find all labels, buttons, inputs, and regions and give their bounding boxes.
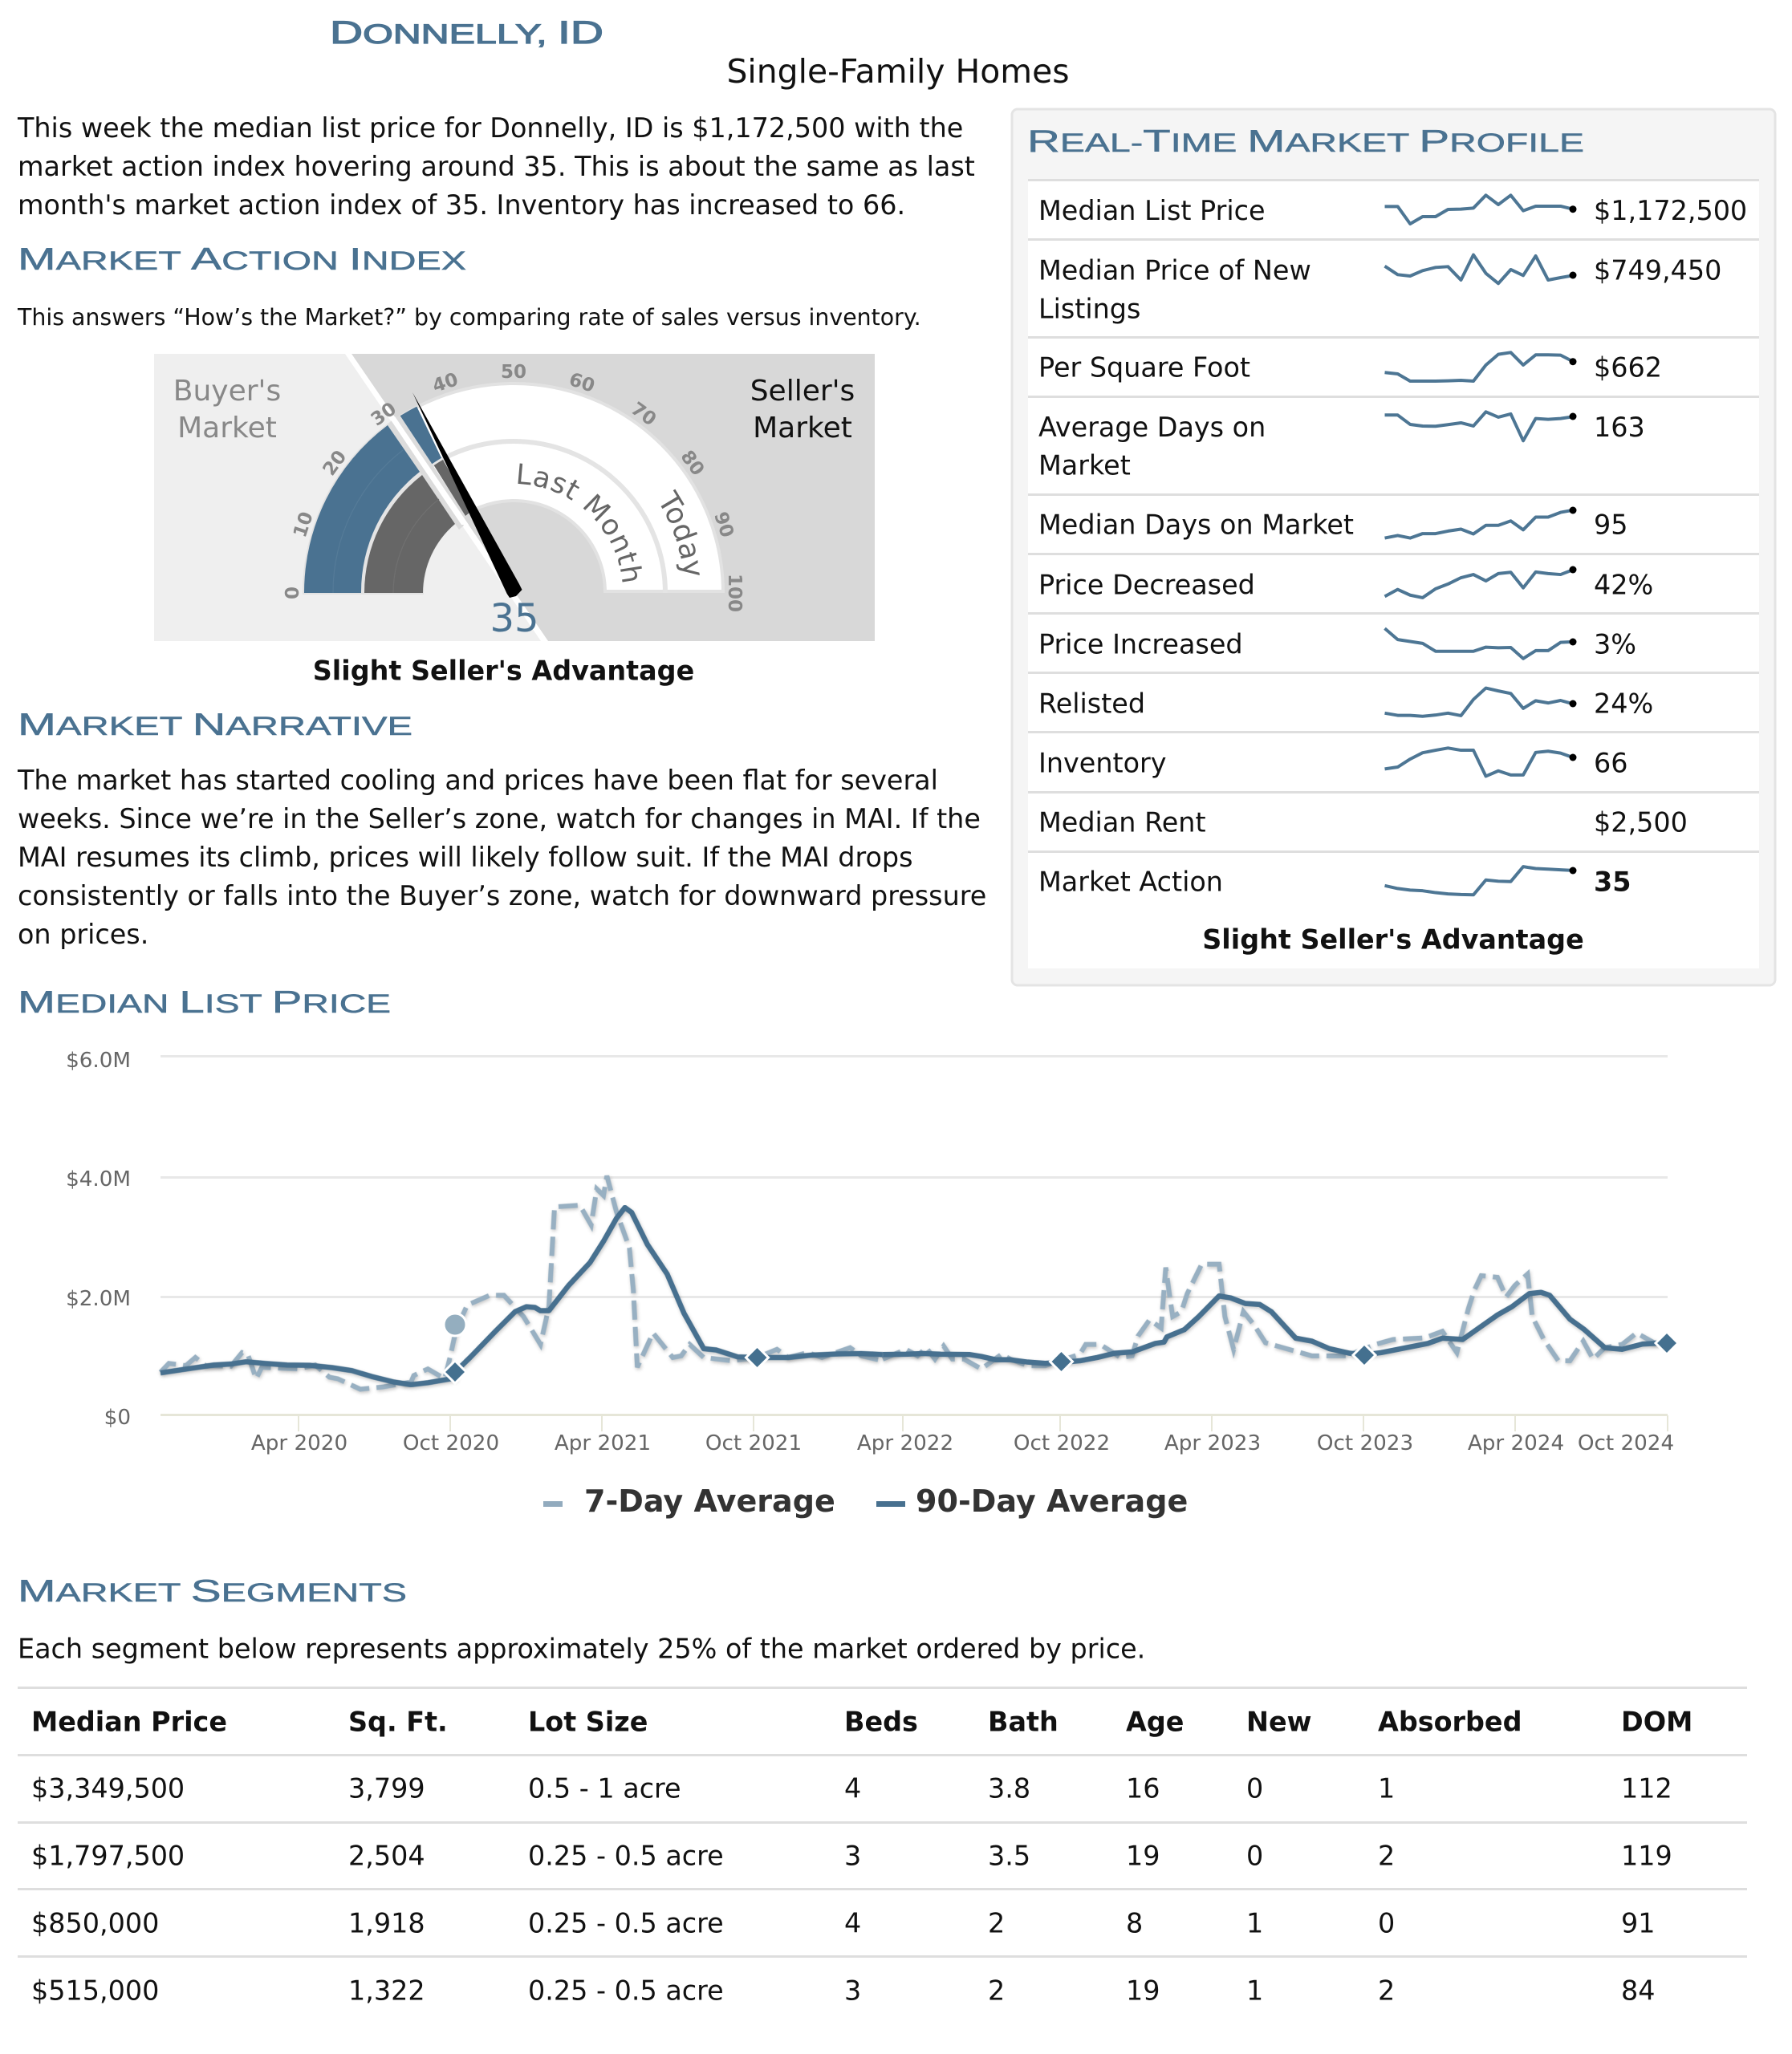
table header bbox=[31, 1706, 1692, 1738]
gauge label: seller's market bbox=[750, 375, 855, 444]
row values: 42% bbox=[1594, 570, 1653, 600]
gauge tick labels: 30 bbox=[368, 399, 400, 430]
table row 3: 0.25 - 0.5 acre bbox=[528, 1908, 724, 1938]
gauge background: buyer's side bbox=[154, 354, 875, 641]
row labels: Inventory bbox=[1038, 748, 1167, 778]
table row 2: 0 bbox=[1246, 1841, 1263, 1871]
y axis labels: $4.0M bbox=[66, 1167, 131, 1191]
gauge tick labels: 10 bbox=[290, 509, 318, 540]
row labels: Listings bbox=[1038, 294, 1140, 324]
table row 1: 4 bbox=[844, 1773, 861, 1804]
row values: $1,172,500 bbox=[1594, 195, 1747, 226]
y axis labels bbox=[66, 1049, 131, 1430]
row values: 66 bbox=[1594, 748, 1627, 778]
heading: median list price: M EDIAN L IST P RICE bbox=[18, 985, 391, 1020]
table: market segments bbox=[18, 1687, 1747, 2006]
table row 3: 0 bbox=[1378, 1908, 1395, 1938]
gauge background: seller's side bbox=[351, 354, 875, 641]
market narrative text: consistently or falls into the Buyer’s zone, watch for downward pressure bbox=[18, 880, 986, 911]
gauge label: buyer's market: Buyer's bbox=[173, 375, 281, 408]
y axis labels: $0 bbox=[104, 1406, 131, 1430]
gauge tick labels: 60 bbox=[567, 369, 597, 397]
table row 2: 3 bbox=[844, 1841, 861, 1871]
table header: Absorbed bbox=[1378, 1706, 1522, 1738]
legend: 90-Day Average bbox=[916, 1484, 1188, 1519]
intro paragraph: month's market action index of 35. Inventory has increased to 66. bbox=[18, 189, 905, 221]
gauge tick labels: 20 bbox=[319, 447, 351, 480]
table row 4 bbox=[31, 1975, 1655, 2006]
markers: diamonds on 90-day series bbox=[444, 1332, 1678, 1383]
gauge label: buyer's market bbox=[173, 375, 281, 444]
row labels: Median Price of New bbox=[1038, 255, 1311, 286]
panel: real-time market profile bbox=[1012, 109, 1775, 985]
table header: Age bbox=[1126, 1706, 1184, 1738]
table row 1: 0.5 - 1 acre bbox=[528, 1773, 681, 1804]
table header: Sq. Ft. bbox=[348, 1706, 448, 1738]
x axis labels bbox=[251, 1431, 1674, 1455]
table row 1 bbox=[31, 1773, 1672, 1804]
row values: 35 bbox=[1594, 867, 1631, 897]
x axis labels: Apr 2022 bbox=[857, 1431, 953, 1455]
table row 3: 8 bbox=[1126, 1908, 1143, 1938]
table row 1: 16 bbox=[1126, 1773, 1160, 1804]
table row 4: 19 bbox=[1126, 1975, 1160, 2006]
intro paragraph: This week the median list price for Donnelly, ID is $1,172,500 with the bbox=[17, 112, 963, 144]
series: 90-day average bbox=[161, 1208, 1667, 1385]
row values bbox=[1594, 195, 1747, 897]
gauge tick labels: 90 bbox=[709, 509, 738, 540]
gauge tick labels: 40 bbox=[430, 369, 461, 397]
gauge tick labels: 100 bbox=[724, 574, 745, 612]
row labels: Median Days on Market bbox=[1038, 509, 1354, 541]
gauge tick labels: 70 bbox=[627, 399, 660, 430]
row values: 163 bbox=[1594, 412, 1645, 443]
x axis labels: Apr 2023 bbox=[1164, 1431, 1261, 1455]
title: D ONNELLY, ID bbox=[330, 15, 603, 51]
x axis labels: Oct 2022 bbox=[1014, 1431, 1110, 1455]
gauge last month arc bbox=[364, 460, 472, 593]
x axis labels: Oct 2021 bbox=[705, 1431, 802, 1455]
table row 2: 2,504 bbox=[348, 1841, 425, 1871]
row labels bbox=[1038, 195, 1354, 897]
table row 3: 2 bbox=[988, 1908, 1005, 1938]
heading: market narrative: M ARKET N ARRATIVE bbox=[18, 708, 412, 742]
market narrative text: on prices. bbox=[18, 919, 148, 950]
table header: New bbox=[1246, 1706, 1311, 1738]
gauge label: buyer's market: Market bbox=[177, 412, 277, 444]
table header: Median Price bbox=[31, 1706, 227, 1738]
sparklines bbox=[1385, 195, 1576, 895]
row values: 95 bbox=[1594, 509, 1627, 541]
row labels: Price Increased bbox=[1038, 629, 1243, 660]
legend bbox=[543, 1484, 1188, 1519]
gauge tick labels: 80 bbox=[677, 447, 708, 480]
market narrative text: MAI resumes its climb, prices will likely follow suit. If the MAI drops bbox=[18, 842, 913, 873]
table row 4: 84 bbox=[1621, 1975, 1655, 2006]
y axis labels: $2.0M bbox=[66, 1287, 131, 1311]
series: 7-day average bbox=[161, 1175, 1667, 1389]
x axis labels: Apr 2024 bbox=[1468, 1431, 1564, 1455]
gauge caption: Slight Seller's Advantage bbox=[313, 655, 694, 687]
row values: 3% bbox=[1594, 629, 1636, 660]
gauge divider bbox=[388, 416, 469, 530]
market narrative text: weeks. Since we’re in the Seller’s zone, watch for changes in MAI. If the bbox=[18, 803, 981, 834]
table row 4: 1 bbox=[1246, 1975, 1263, 2006]
table row 4: 2 bbox=[1378, 1975, 1395, 2006]
table row 2: 0.25 - 0.5 acre bbox=[528, 1841, 724, 1871]
row values: $749,450 bbox=[1594, 255, 1721, 286]
table row 3: 1 bbox=[1246, 1908, 1263, 1938]
row labels: Market Action bbox=[1038, 867, 1223, 897]
table row 1: 3,799 bbox=[348, 1773, 425, 1804]
table header: Lot Size bbox=[528, 1706, 648, 1738]
gauge today arc bbox=[304, 407, 441, 593]
table row 4: 0.25 - 0.5 acre bbox=[528, 1975, 724, 2006]
table header: Beds bbox=[844, 1706, 918, 1738]
table row 2 bbox=[31, 1841, 1672, 1871]
heading: market segments: M ARKET S EGMENTS bbox=[18, 1574, 407, 1609]
gauge bbox=[154, 354, 875, 641]
panel caption: Slight Seller's Advantage bbox=[1202, 924, 1584, 955]
market narrative text: The market has started cooling and prices have been flat for several bbox=[17, 765, 938, 796]
x axis labels: Apr 2021 bbox=[555, 1431, 651, 1455]
table row 1: 3.8 bbox=[988, 1773, 1030, 1804]
gauge tick labels: 50 bbox=[501, 362, 526, 383]
marker: circle on 7-day series bbox=[444, 1313, 466, 1336]
table row 4: 3 bbox=[844, 1975, 861, 2006]
market segments description: Each segment below represents approximately 25% of the market ordered by price. bbox=[18, 1634, 1145, 1664]
row labels: Relisted bbox=[1038, 688, 1145, 719]
y axis labels: $6.0M bbox=[66, 1049, 131, 1073]
row values: $662 bbox=[1594, 351, 1662, 384]
x axis ticks bbox=[298, 1415, 1668, 1431]
row labels: Average Days on bbox=[1038, 412, 1266, 443]
table row 2: $1,797,500 bbox=[31, 1841, 185, 1871]
gauge tick labels bbox=[282, 362, 745, 612]
table row 2: 119 bbox=[1621, 1841, 1672, 1871]
table row 4: 2 bbox=[988, 1975, 1005, 2006]
y axis grid bbox=[161, 1055, 1668, 1416]
x axis labels: Apr 2020 bbox=[251, 1431, 347, 1455]
table row 1: 1 bbox=[1378, 1773, 1395, 1804]
table row 4: 1,322 bbox=[348, 1975, 425, 2006]
intro paragraph: market action index hovering around 35. This is about the same as last bbox=[18, 151, 975, 182]
x axis labels: Oct 2020 bbox=[403, 1431, 499, 1455]
table row 1: $3,349,500 bbox=[31, 1773, 185, 1804]
gauge value: 35 bbox=[490, 596, 539, 641]
gauge label: seller's market: Market bbox=[753, 412, 852, 444]
table row 4: $515,000 bbox=[31, 1975, 159, 2006]
row labels: Median Rent bbox=[1038, 807, 1206, 838]
heading: market action index: M ARKET A CTION INDEX bbox=[18, 242, 466, 277]
gauge tick labels: 0 bbox=[282, 587, 303, 599]
gauge needle bbox=[412, 392, 522, 598]
x axis labels: Oct 2024 bbox=[1578, 1431, 1674, 1455]
x axis labels: Oct 2023 bbox=[1317, 1431, 1413, 1455]
panel heading: R EAL- T IME M ARKET P ROFILE bbox=[1027, 124, 1584, 159]
intro paragraph bbox=[17, 112, 975, 221]
table row 1: 0 bbox=[1246, 1773, 1263, 1804]
row labels: Market bbox=[1038, 449, 1131, 481]
table row 1: 112 bbox=[1621, 1773, 1672, 1804]
row labels: Price Decreased bbox=[1038, 570, 1255, 600]
row values: $2,500 bbox=[1594, 807, 1688, 838]
market action description: This answers “How’s the Market?” by comparing rate of sales versus inventory. bbox=[17, 304, 921, 331]
line chart: median list price bbox=[66, 1049, 1678, 1519]
table header: DOM bbox=[1621, 1706, 1692, 1738]
table row 3: $850,000 bbox=[31, 1908, 159, 1938]
table row 3: 1,918 bbox=[348, 1908, 425, 1938]
row values: 24% bbox=[1594, 688, 1653, 719]
table header: Bath bbox=[988, 1706, 1059, 1738]
table row 3: 91 bbox=[1621, 1908, 1655, 1938]
table row 2: 19 bbox=[1126, 1841, 1160, 1871]
subtitle: Single-Family Homes bbox=[726, 52, 1070, 91]
market narrative text bbox=[17, 765, 986, 950]
table row 2: 3.5 bbox=[988, 1841, 1030, 1871]
table row 3 bbox=[31, 1908, 1655, 1938]
table row 3: 4 bbox=[844, 1908, 861, 1938]
gauge white ring bbox=[304, 384, 723, 593]
legend: 7-Day Average bbox=[584, 1484, 835, 1519]
gauge label: last month: Last Month bbox=[518, 464, 642, 583]
row labels: Median List Price bbox=[1038, 195, 1265, 226]
row labels: Per Square Foot bbox=[1038, 351, 1250, 384]
table row 2: 2 bbox=[1378, 1841, 1395, 1871]
gauge label: today: Today bbox=[661, 489, 700, 575]
gauge label: seller's market: Seller's bbox=[750, 375, 855, 408]
